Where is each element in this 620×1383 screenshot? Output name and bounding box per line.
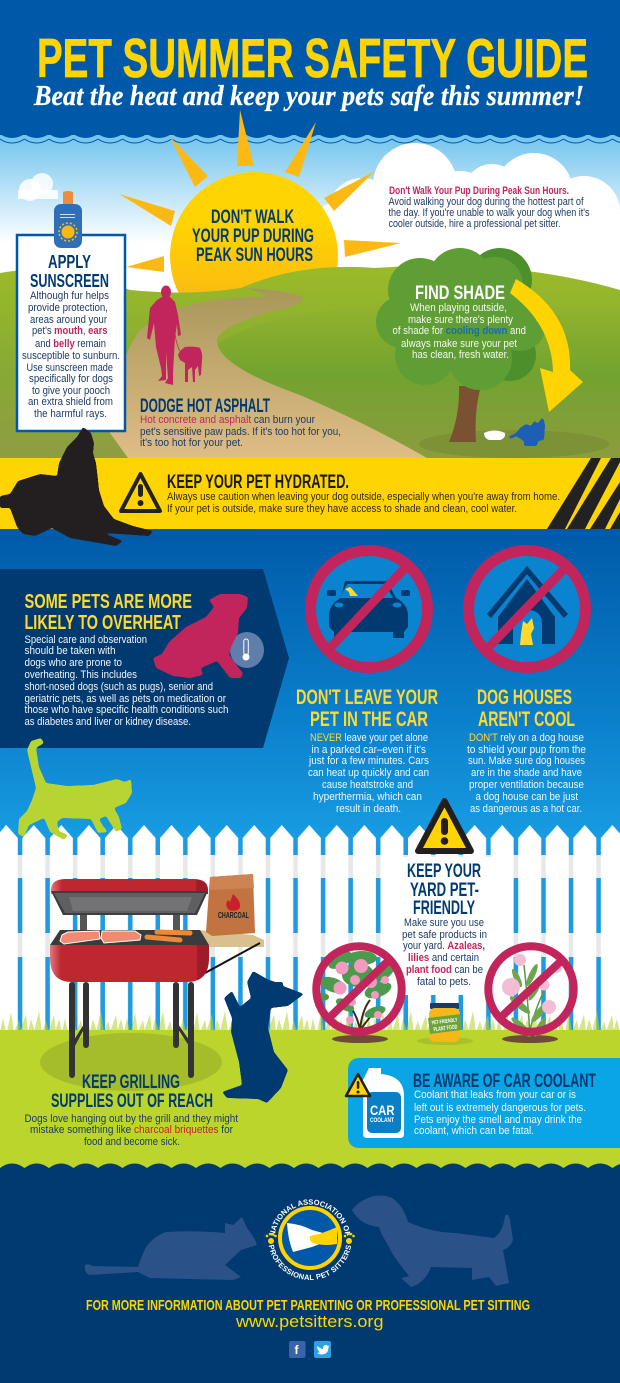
- car: [327, 581, 410, 638]
- icon: warning triangle: [121, 474, 160, 511]
- white picket fence: [0, 825, 620, 1040]
- text: find shade: [392, 282, 526, 361]
- text: sunscreen advice: Although fur helps: [30, 290, 109, 302]
- text: find shade: always make sure your pet: [401, 338, 517, 350]
- text: sunscreen advice: susceptible to sunburn.: [22, 350, 120, 362]
- heading: don't walk: [192, 206, 314, 266]
- heading: overheat: [24, 590, 192, 634]
- icon: twitter: [314, 1341, 331, 1358]
- panel: apply sunscreen: [17, 191, 125, 431]
- heading: don't walk: YOUR PUP DURING: [192, 225, 314, 247]
- grill bowl: [50, 945, 209, 982]
- icon: no lilies: [488, 946, 574, 1038]
- text: yard: KEEP YOUR: [407, 860, 481, 882]
- text: sunscreen advice: pet's mouth, ears: [32, 325, 108, 337]
- heading and text: dodge hot asphalt: Hot concrete and asphalt can burn your: [140, 414, 315, 426]
- text: car warning: can heat up quickly and can: [308, 767, 429, 779]
- text: coolant: Pets enjoy the smell and may drink the: [414, 1114, 582, 1126]
- grill lid: [51, 879, 208, 894]
- text: overheat: geriatric pets, as well as pets on medication or: [24, 693, 226, 705]
- text: peak sun hours: Avoid walking your dog during the hottest part of: [388, 196, 584, 208]
- icon: coolant jug: CAR: [370, 1102, 394, 1118]
- text: coolant: left out is extremely dangerous for pets.: [414, 1102, 586, 1114]
- paw prints: [266, 1233, 355, 1244]
- text: hydrated: [167, 491, 560, 515]
- icon: coolant jug: [363, 1068, 404, 1138]
- cat on fence: [18, 738, 132, 840]
- text: sunscreen advice: Use sunscreen made: [26, 362, 113, 374]
- icon: thermometer: [230, 632, 264, 668]
- icon: no pets in car: [310, 550, 428, 668]
- text: peak sun hours: Don't Walk Your Pup During Peak Sun Hours.: [389, 185, 569, 197]
- heading and text: dodge hot asphalt: it's too hot for your pet.: [140, 437, 243, 449]
- heading: don't leave your pet: PET IN THE CAR: [310, 708, 428, 731]
- heading: overheat: SOME PETS ARE MORE: [24, 590, 192, 613]
- text: overheat: Special care and observation: [24, 634, 147, 646]
- heading: overheat: LIKELY TO OVERHEAT: [24, 611, 181, 634]
- logo: [266, 1199, 355, 1280]
- heading: dog houses: DOG HOUSES: [477, 686, 572, 709]
- text: find shade: has clean, fresh water.: [412, 349, 509, 361]
- text: sunscreen advice: and belly remain: [35, 338, 106, 350]
- icon: barbecue grill: [50, 874, 264, 1078]
- heading and text: dodge hot asphalt: [140, 396, 341, 449]
- text: keep grilling: SUPPLIES OUT OF REACH: [51, 1091, 213, 1112]
- icon: facebook: [289, 1341, 306, 1358]
- text: coolant: coolant, which can be fatal.: [414, 1125, 534, 1137]
- footer cat silhouette: [85, 1217, 257, 1280]
- clouds: [18, 143, 620, 300]
- text: dog house warning: sun. Make sure dog houses: [468, 755, 585, 767]
- lower green hill: [216, 306, 620, 458]
- text: sunscreen advice: specifically for dogs: [29, 373, 113, 385]
- text: yard: lilies and certain: [408, 952, 479, 964]
- heading: don't leave your pet: DON'T LEAVE YOUR: [296, 686, 438, 709]
- text: dog house warning: to shield your pup from the: [467, 744, 586, 756]
- text: car warning: result in death.: [336, 803, 401, 815]
- icon: facebook: f: [294, 1343, 300, 1357]
- text: peak sun hours: cooler outside, hire a professional pet sitter.: [388, 218, 560, 230]
- sun rays: [119, 110, 401, 272]
- charcoal bag: CHARCOAL: [218, 911, 249, 920]
- text: yard: YARD PET-: [410, 879, 479, 901]
- header band: [0, 0, 620, 135]
- text: dog house warning: [467, 732, 586, 815]
- text: yard: FRIENDLY: [413, 897, 475, 919]
- logo: PROFESSIONAL PET SITTERS: [268, 1244, 351, 1280]
- grill shadow: [40, 1033, 222, 1091]
- icon: warning triangle yard: [418, 801, 471, 851]
- footer dog silhouette: [352, 1196, 513, 1287]
- text: dog house warning: proper ventilation because: [469, 779, 584, 791]
- icon: no azaleas: [315, 946, 402, 1032]
- text: keep grilling: KEEP GRILLING: [82, 1072, 180, 1093]
- icon: coolant jug: COOLANT: [370, 1117, 394, 1124]
- text: find shade: of shade for cooling down and: [392, 325, 526, 337]
- text: sunscreen advice: areas around your: [30, 314, 107, 326]
- text: find shade: FIND SHADE: [415, 282, 505, 304]
- side shelf: [197, 930, 264, 947]
- grate: [50, 930, 209, 945]
- wave divider: [0, 130, 620, 150]
- heading and text: dodge hot asphalt: DODGE HOT ASPHALT: [140, 396, 270, 417]
- text: overheat: [24, 634, 228, 728]
- text: sunscreen advice: provide protection,: [28, 302, 108, 314]
- blue section: [0, 529, 620, 839]
- icon: small warning: [346, 1074, 370, 1096]
- heading: apply sunscreen: [30, 251, 109, 291]
- text: sunscreen advice: to give your pooch: [32, 385, 110, 397]
- text: sunscreen advice: the harmful rays.: [34, 408, 107, 420]
- text: overheat: as diabetes and liver or kidney disease.: [24, 716, 191, 728]
- warning stripes: [547, 458, 620, 529]
- text: peak sun hours: [388, 185, 590, 230]
- text: yard: plant food can be: [406, 964, 483, 976]
- icon: sunscreen bottle: [54, 191, 82, 248]
- ground shadow: [419, 430, 609, 458]
- sky: [0, 135, 620, 310]
- panel: overheat arrow: [0, 569, 289, 748]
- footer: [0, 1170, 620, 1383]
- icon: black dog howling: [0, 427, 153, 546]
- text: hydrated: Always use caution when leaving your dog outside, especially when you're away from home.: [167, 491, 560, 503]
- plant shadows: [332, 1035, 558, 1043]
- arrow to shade: [510, 279, 583, 412]
- hills: [0, 266, 620, 458]
- icon: water bowl: [484, 430, 505, 440]
- heading: dog houses: AREN'T COOL: [478, 708, 575, 731]
- icon: pink pug: [153, 594, 248, 678]
- text: car warning: just for a few minutes. Cars: [308, 755, 429, 767]
- white area behind yard text: [395, 857, 495, 995]
- text: overheat: dogs who are prone to: [24, 657, 122, 669]
- lawn: [0, 1030, 620, 1170]
- steaks: [60, 931, 100, 944]
- text: find shade: make sure there's plenty: [408, 314, 513, 326]
- charcoal bag: [206, 874, 255, 936]
- heading: dog houses: [477, 686, 575, 731]
- website: www.petsitters.org: [235, 1312, 384, 1331]
- text: yard: your yard. Azaleas,: [403, 940, 485, 952]
- text: dog house warning: as dangerous as a hot car.: [470, 803, 582, 815]
- text: dog house warning: a dog house can be just: [476, 791, 578, 803]
- heading: don't walk: PEAK SUN HOURS: [196, 244, 313, 266]
- icon: no dog houses: [468, 550, 586, 668]
- heading: hydrated: KEEP YOUR PET HYDRATED.: [167, 471, 349, 493]
- text: dog house warning: DON'T rely on a dog house: [469, 732, 584, 744]
- heading and text: dodge hot asphalt: pet's sensitive paw pads. If it's too hot for you,: [140, 426, 341, 438]
- icon: person walking dog: [147, 286, 202, 385]
- text: car warning: NEVER leave your pet alone: [310, 732, 428, 744]
- text: dog house warning: are in the shade and have: [471, 767, 582, 779]
- text: sunscreen advice: [22, 290, 120, 420]
- heading: apply sunscreen: SUNSCREEN: [30, 270, 109, 291]
- text: car warning: in a parked car–even if it's: [312, 744, 426, 756]
- icon: tree: [376, 248, 546, 442]
- text: yard: fatal to pets.: [417, 976, 471, 988]
- text: yard: [402, 860, 487, 988]
- text: yard: pet safe products in: [402, 929, 487, 941]
- text: keep grilling: food and become sick.: [84, 1136, 180, 1148]
- heading: apply sunscreen: APPLY: [48, 251, 91, 272]
- hydrated band: [0, 458, 620, 529]
- text: coolant: Coolant that leaks from your car or is: [414, 1089, 576, 1101]
- text: keep grilling: [24, 1072, 238, 1148]
- winding path: [110, 288, 427, 458]
- text: keep grilling: mistake something like charcoal briquettes for: [30, 1124, 233, 1136]
- grill legs: [69, 982, 194, 1078]
- heading: don't walk: DON'T WALK: [211, 206, 294, 228]
- text: overheat: overheating. This includes: [24, 669, 137, 681]
- text: overheat: short-nosed dogs (such as pugs), senior and: [24, 681, 213, 693]
- heading: don't leave your pet: [296, 686, 438, 731]
- text: find shade: When playing outside,: [410, 302, 507, 314]
- text: overheat: should be taken with: [24, 645, 116, 657]
- text: car warning: cause heatstroke and: [322, 779, 413, 791]
- text: sunscreen advice: an extra shield from: [28, 396, 113, 408]
- text: car warning: hyperthermia, which can: [313, 791, 422, 803]
- text: yard: Make sure you use: [404, 917, 484, 929]
- sausages: [147, 932, 190, 940]
- logo: NATIONAL ASSOCIATION OF: [270, 1199, 350, 1236]
- grass blades: [0, 1010, 620, 1032]
- icon: blue cat drinking: [508, 417, 545, 446]
- text: overheat: those who have specific health conditions such: [24, 704, 228, 716]
- text: car warning: [308, 732, 429, 815]
- icon: blue dog reaching: [222, 971, 304, 1103]
- text: hydrated: If your pet is outside, make sure they have access to shade and clean, cool water.: [167, 503, 517, 515]
- icon: plant food jar: PET-FRIENDLY: [431, 1017, 458, 1027]
- dog in car: [345, 587, 358, 596]
- text: coolant: [414, 1089, 586, 1137]
- panel: car coolant: [346, 1058, 620, 1148]
- sun: [170, 172, 338, 340]
- text: keep grilling: Dogs love hanging out by the grill and they might: [24, 1113, 238, 1125]
- icon: plant food jar: [428, 1003, 462, 1042]
- fence backing: [0, 838, 620, 1038]
- icon: plant food jar: PLANT FOOD: [433, 1024, 458, 1033]
